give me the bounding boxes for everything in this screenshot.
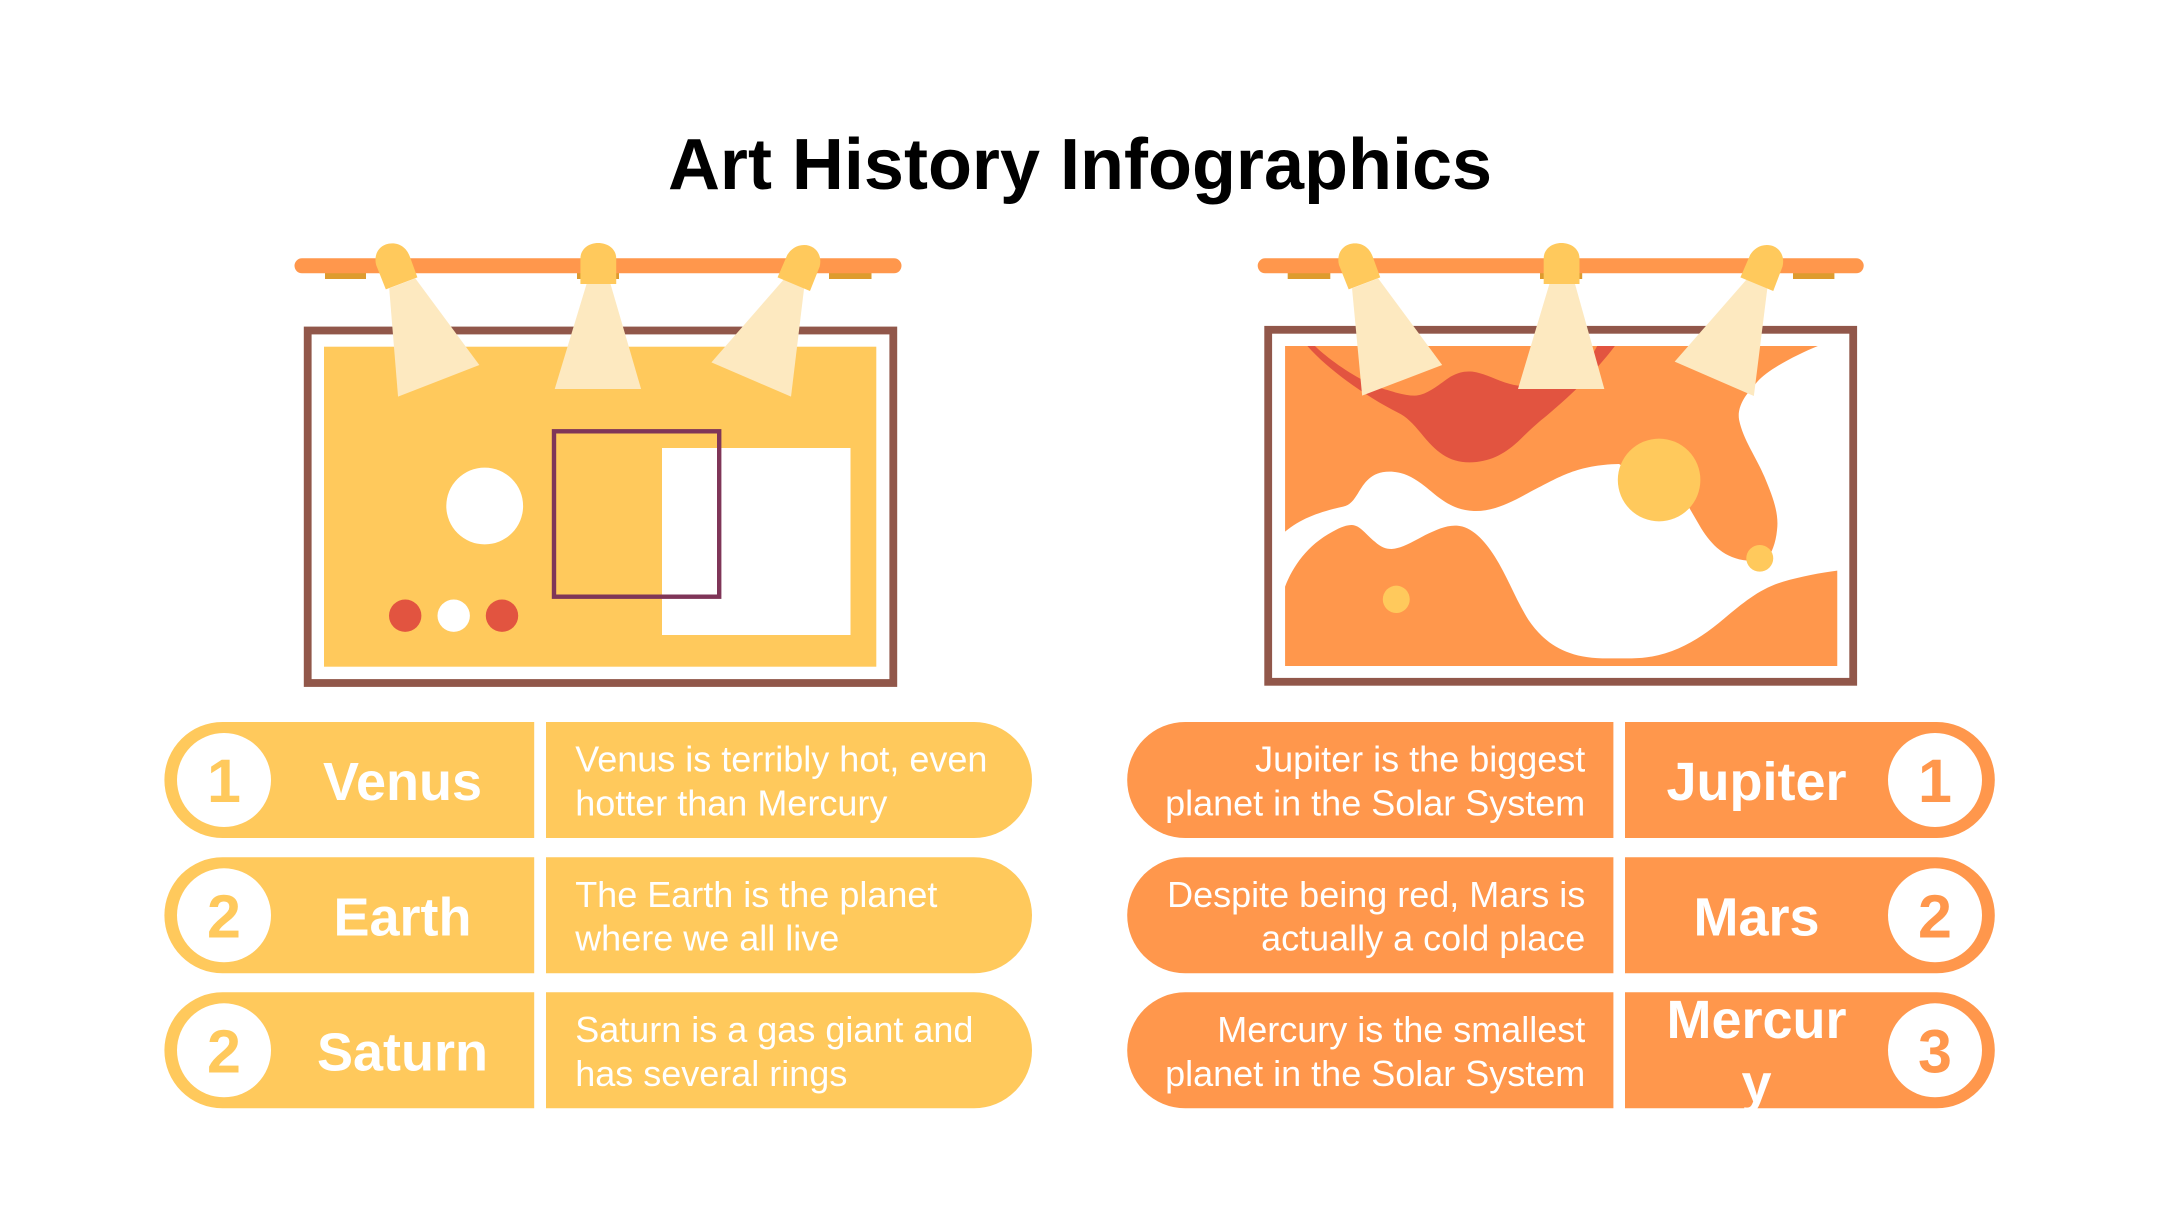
panel: Mars row bbox=[1127, 857, 1995, 973]
right abstract painting bbox=[1285, 346, 1837, 666]
left spotlights bbox=[375, 243, 820, 397]
text: Earth description: where we all live bbox=[574, 917, 839, 958]
panel: Jupiter row bbox=[1127, 722, 1995, 838]
panel: Earth row bbox=[164, 857, 1032, 973]
number badge 2: 2 bbox=[207, 882, 241, 950]
text: Mars description: Despite being red, Mars is bbox=[1167, 874, 1585, 915]
number badge 2 bbox=[1888, 868, 1982, 962]
pill: Venus name bbox=[164, 722, 534, 838]
heading: Mercury, wrapped: Mercur bbox=[1666, 990, 1847, 1050]
pill: Jupiter description bbox=[1127, 722, 1613, 838]
number badge 2 bbox=[177, 868, 271, 962]
number badge 3 bbox=[1888, 1003, 1982, 1097]
number badge 1 bbox=[177, 733, 271, 827]
text: Venus description: hotter than Mercury bbox=[575, 782, 887, 824]
left picture rail bbox=[294, 258, 902, 279]
number badge 2: 2 bbox=[207, 1017, 241, 1085]
panel: Mercury row bbox=[1127, 990, 1995, 1114]
right picture rail bbox=[1258, 258, 1864, 279]
pill: Earth name bbox=[164, 857, 534, 973]
pill: Mercury name bbox=[1625, 992, 1995, 1108]
number badge 2: 2 bbox=[1918, 882, 1952, 950]
heading: Jupiter: Jupiter bbox=[1666, 752, 1847, 812]
number badge 1: 1 bbox=[207, 747, 241, 815]
panel: Saturn row bbox=[164, 992, 1032, 1108]
heading: Earth: Earth bbox=[333, 887, 472, 947]
number badge 1 bbox=[1888, 733, 1982, 827]
panel: left gallery painting bbox=[294, 243, 902, 683]
heading: Mercury, wrapped: y bbox=[1741, 1054, 1772, 1114]
right painting frame bbox=[1268, 330, 1853, 682]
number badge 3: 3 bbox=[1918, 1017, 1952, 1085]
text: Earth description: The Earth is the planet bbox=[575, 874, 937, 915]
right spotlights bbox=[1338, 243, 1783, 396]
left abstract painting bbox=[324, 347, 876, 667]
heading: Mars: Mars bbox=[1693, 887, 1820, 947]
pill: Earth description bbox=[546, 857, 1032, 973]
pill: Jupiter name bbox=[1625, 722, 1995, 838]
text: Saturn description: Saturn is a gas giant and bbox=[575, 1009, 973, 1050]
title: Art History Infographics bbox=[668, 125, 1492, 205]
heading: Saturn: Saturn bbox=[317, 1022, 488, 1082]
pill: Saturn name bbox=[164, 992, 534, 1108]
panel: Venus row bbox=[164, 722, 1032, 838]
number badge 1: 1 bbox=[1918, 747, 1952, 815]
text: Venus description: Venus is terribly hot, even bbox=[575, 738, 987, 780]
text: Jupiter description: Jupiter is the biggest bbox=[1255, 738, 1585, 780]
pill: Saturn description bbox=[546, 992, 1032, 1108]
text: Jupiter description: planet in the Solar System bbox=[1165, 782, 1585, 824]
text: Mercury description: planet in the Solar System bbox=[1165, 1053, 1585, 1094]
text: Mars description: actually a cold place bbox=[1261, 917, 1585, 958]
heading: Venus: Venus bbox=[323, 752, 482, 812]
pill: Mars description bbox=[1127, 857, 1613, 973]
panel: right gallery painting bbox=[1258, 243, 1864, 682]
pill: Mercury description bbox=[1127, 992, 1613, 1108]
pill: Venus description bbox=[546, 722, 1032, 838]
text: Saturn description: has several rings bbox=[575, 1053, 847, 1094]
left painting frame bbox=[308, 330, 893, 683]
number badge 2 bbox=[177, 1003, 271, 1097]
text: Mercury description: Mercury is the smallest bbox=[1217, 1009, 1585, 1050]
pill: Mars name bbox=[1625, 857, 1995, 973]
